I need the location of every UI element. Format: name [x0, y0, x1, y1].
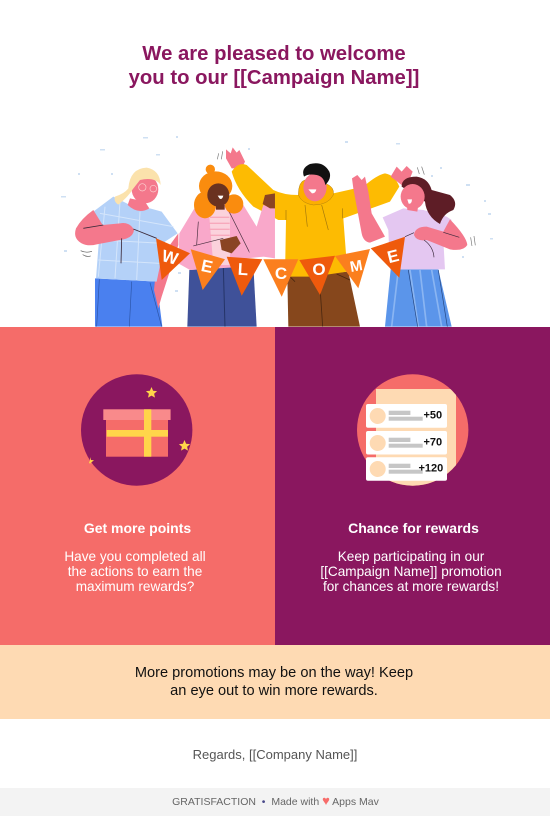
text block: [[Campaign Name]] promotion [320, 564, 502, 579]
person 3 [217, 147, 424, 327]
icon: points list [357, 374, 468, 486]
text block: an eye out to win more rewards. [170, 683, 378, 699]
panel: get more points [0, 327, 275, 645]
person 2 [178, 165, 275, 327]
confetti [61, 136, 493, 292]
person 4 [352, 175, 475, 327]
heading: Get more points [84, 520, 191, 536]
title [128, 43, 419, 89]
icon: points list: +70 [424, 436, 442, 448]
bunting flags: E [385, 246, 401, 267]
footer text: GRATISFACTION • Made with ♥ Apps Mav [172, 793, 379, 808]
text block [64, 549, 206, 594]
panel: chance for rewards [275, 327, 550, 645]
footer [0, 788, 550, 816]
banner: more promotions [0, 645, 550, 719]
illustration: welcome party [61, 136, 493, 327]
text block: Have you completed all [64, 549, 206, 564]
icon: gift box [81, 374, 192, 486]
icon: points list: +120 [418, 462, 443, 474]
bunting flags: C [275, 264, 287, 283]
bunting flags [156, 237, 405, 297]
text block [320, 549, 502, 594]
text block: Keep participating in our [338, 549, 484, 564]
bunting flags: L [237, 260, 249, 279]
text block: More promotions may be on the way! Keep [135, 665, 413, 681]
text block: the actions to earn the [68, 564, 202, 579]
title: you to our [[Campaign Name]] [129, 67, 419, 89]
person 1 [75, 168, 178, 327]
title: We are pleased to welcome [142, 43, 406, 65]
bunting flags: E [199, 256, 214, 277]
bunting flags: M [349, 257, 364, 276]
text block: maximum rewards? [76, 579, 194, 594]
regards: Regards, [[Company Name]] [193, 747, 357, 762]
bunting flags: O [312, 260, 326, 279]
icon: points list: +50 [424, 410, 442, 422]
bunting flags: W [160, 246, 181, 269]
text block: for chances at more rewards! [323, 579, 499, 594]
text block [135, 665, 413, 699]
heading: Chance for rewards [348, 520, 479, 536]
